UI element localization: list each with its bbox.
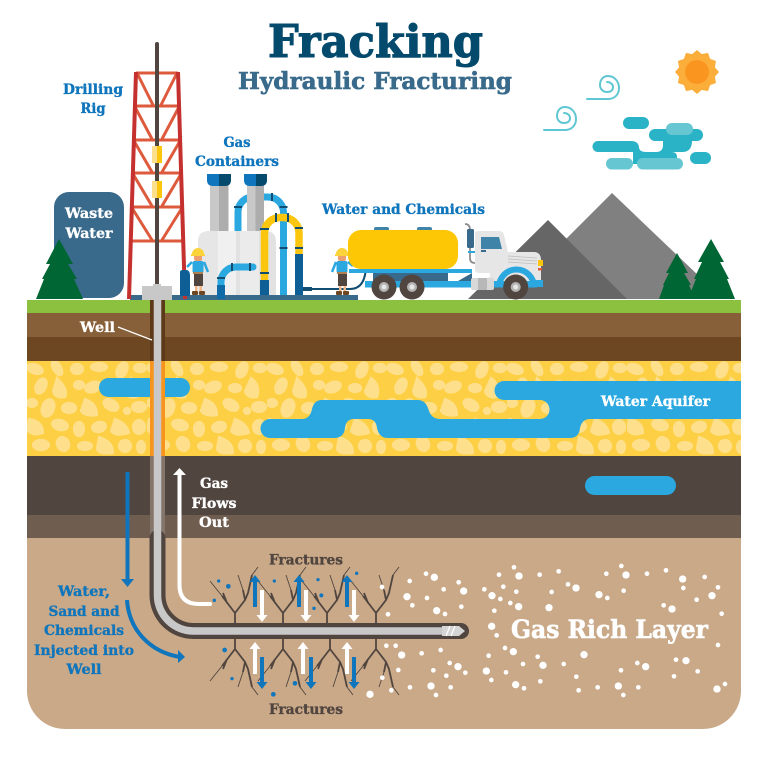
platform base [130,295,358,300]
tank [348,227,458,269]
well casing through layers [150,300,465,636]
worker 2 [332,248,353,295]
waste water tank [36,192,124,299]
label: water and chemicals: Water and Chemicals [321,202,485,218]
icon: clouds [593,117,711,170]
label: water aquifer: Water Aquifer [600,394,711,410]
label: gas flows out: Out [199,515,230,531]
subtitle: Hydraulic Fracturing [238,68,512,95]
label: drilling rig: Drilling [63,82,123,98]
fuel tank [471,278,494,290]
icon: wind swirls [544,76,619,130]
gas bubbles [398,564,727,697]
truck [348,224,543,300]
label: waste water: Water [64,226,113,242]
wellhead [142,284,172,300]
cab [475,231,543,281]
arrow: gas flows out [173,468,210,604]
label: water sand and chemicals: Sand and [48,604,120,620]
label: gas flows out: Gas [200,476,228,492]
fracture arrows lower [250,642,360,689]
gas bubbles near fractures [366,585,401,698]
label: waste water: Waste [64,206,113,222]
label: gas flows out [192,476,237,531]
drill pole [155,42,159,288]
label: drilling rig: Rig [80,101,106,117]
yellow pipe [264,218,299,281]
drill bit [442,626,465,636]
icon: tree left [36,239,83,299]
label: water sand and chemicals: Well [65,662,102,678]
label: waste water [64,206,113,242]
worker 1 [187,248,208,295]
label: fractures bottom: Fractures [269,702,343,718]
label: gas containers: Containers [195,154,279,170]
label: water sand and chemicals [34,584,134,678]
fractures upper [210,567,399,623]
blue fluid dots [213,572,358,697]
hose [303,264,366,289]
arrow: injection curve [127,600,185,663]
label: water sand and chemicals: Chemicals [44,623,124,639]
mountains [468,193,723,299]
label: fractures top: Fractures [269,552,343,568]
chassis [349,269,537,288]
stacks [207,174,267,233]
wheels [372,274,528,300]
pipe joints [234,193,303,274]
label: water sand and chemicals: Injected into [34,643,134,659]
gas containers [180,174,366,299]
label: well: Well [79,320,115,336]
water aquifer [99,378,741,495]
label: gas flows out: Flows [192,496,237,512]
exhaust [465,224,475,263]
fracture arrows upper [250,575,360,622]
ground layers [27,300,741,729]
arrow: injection down [121,472,134,587]
label: water sand and chemicals: Water, [57,584,110,600]
title: Fracking [268,15,483,68]
fender [499,270,534,287]
icon: trees right [659,239,735,299]
label: well [79,320,152,340]
drilling rig [129,42,185,300]
label: gas containers: Gas [224,135,251,151]
label: gas containers [195,135,279,170]
label: drilling rig [63,82,123,117]
tanks [198,231,276,295]
label: gas rich layer: Gas Rich Layer [511,615,709,644]
icon: sun [675,50,719,94]
fractures lower [210,639,399,695]
lower elbow pipe [221,267,253,285]
